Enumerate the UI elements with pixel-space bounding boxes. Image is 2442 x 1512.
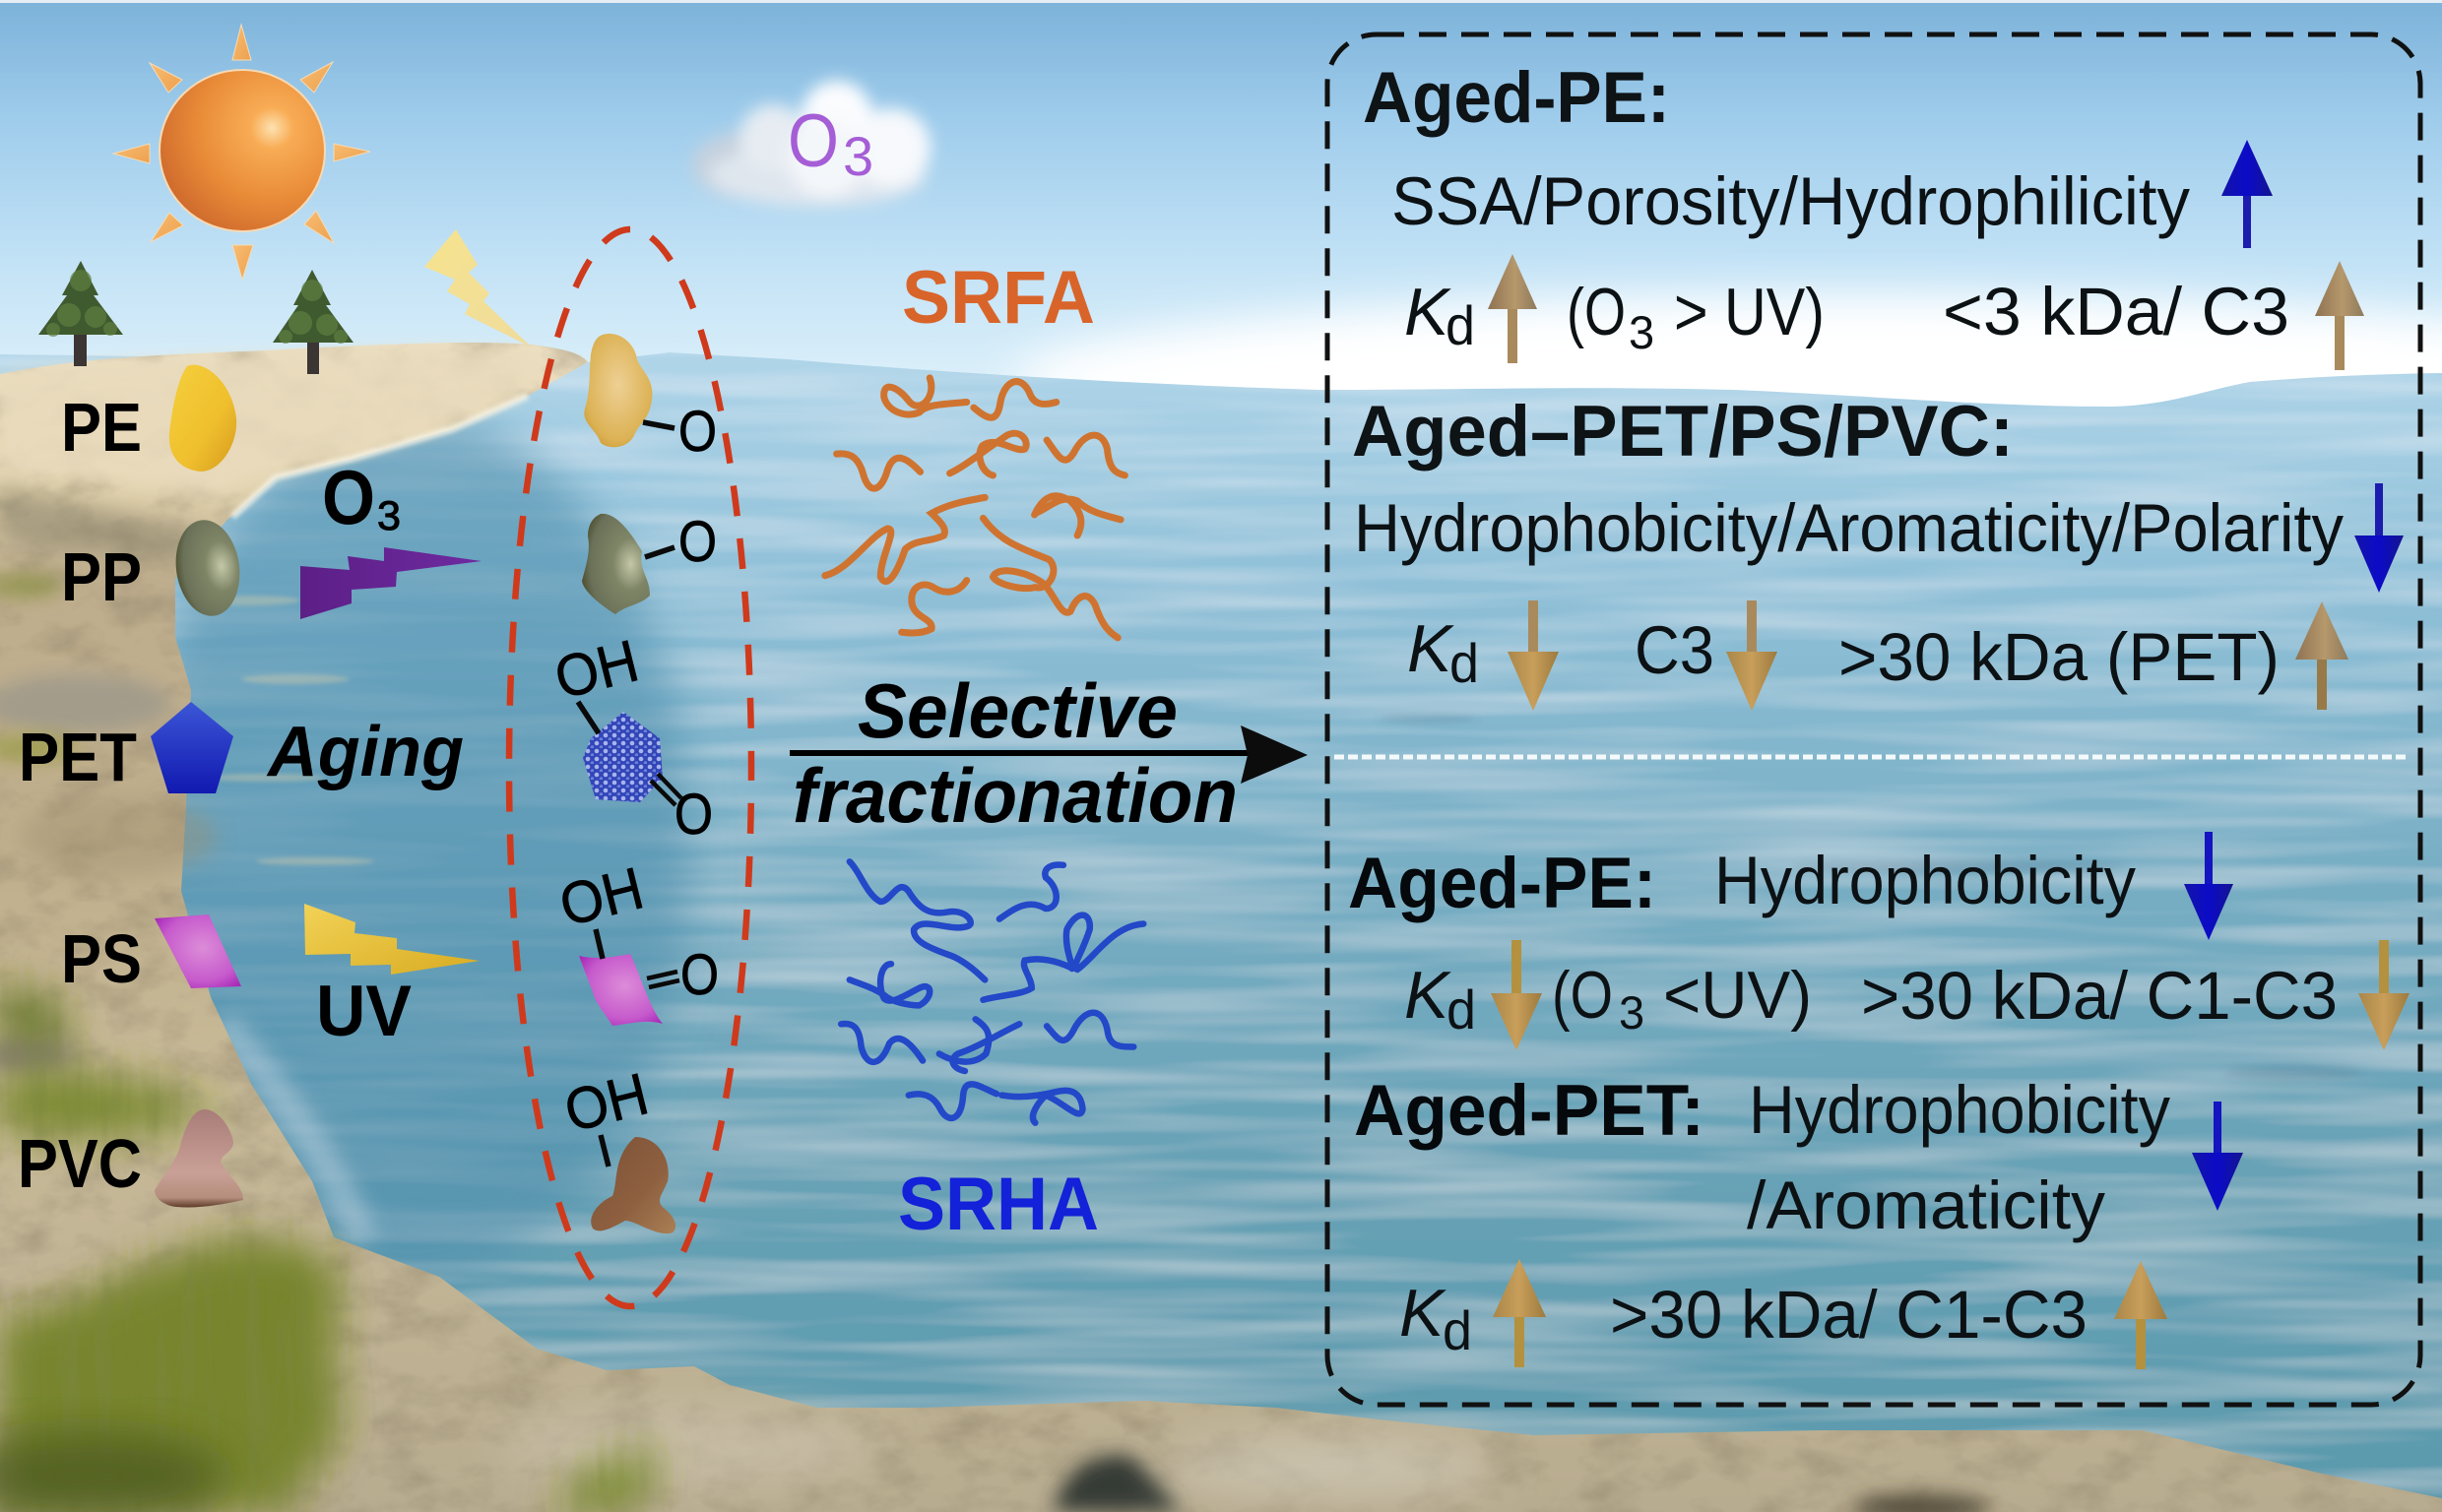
icon: pine tree right [273, 270, 353, 374]
icon: PET particle [151, 702, 233, 793]
aged PS with hydroxyl and carbonyl: OH [553, 854, 650, 939]
aged PET with hydroxyl and carbonyl: O [675, 783, 713, 847]
arrow: gold down [1508, 600, 1559, 711]
text: 30 kDa C1-C3: >30 kDa/ C1-C3 [1610, 1277, 2088, 1353]
polymer labels and particles [18, 365, 246, 1208]
sun disc [160, 70, 325, 231]
arrow: gold down [2358, 940, 2410, 1050]
text: 30 kDa PET: >30 kDa (PET) [1838, 619, 2280, 695]
arrow: UV yellow bolt [304, 904, 480, 975]
text: O3 greater than UV [1567, 275, 1825, 358]
sun rays [113, 25, 370, 280]
SRHA section [1348, 832, 2410, 1369]
heading: Aged-PE: Aged-PE: [1363, 58, 1670, 138]
arrow: blue down [2192, 1102, 2243, 1211]
text: Kd: K [1399, 1276, 1446, 1351]
arrow: gold up [2114, 1261, 2167, 1369]
UV label: UV [316, 972, 412, 1051]
icon: cloud with O3: 3 [843, 125, 873, 187]
sky [0, 0, 2442, 413]
PS label: PS [61, 920, 142, 997]
text: Kd: K [1404, 275, 1451, 349]
icon: PP particle [169, 516, 246, 620]
PP label: PP [61, 538, 142, 615]
sea [0, 352, 2442, 1512]
O3 aging label: 3 [377, 492, 401, 538]
text: O3 greater than UV: 3 [1629, 306, 1654, 358]
foam [232, 396, 528, 517]
grass [0, 984, 660, 1512]
arrow: blue down [2184, 832, 2233, 940]
text: Kd: d [1449, 632, 1479, 694]
darker shallow water at left [138, 413, 689, 1280]
arrow: O3 purple bolt [300, 547, 482, 619]
PET label: PET [19, 719, 137, 795]
text: O3 greater than UV: > UV) [1674, 275, 1825, 349]
text: 30 kDa C1-C3: >30 kDa/ C1-C3 [1861, 958, 2338, 1034]
text: O3 greater than UV: (O [1567, 275, 1626, 349]
aged PVC with hydroxyl [558, 1060, 675, 1233]
label: O3: O [788, 99, 839, 183]
text: C3: C3 [1635, 612, 1714, 688]
heading: Aged PET PS PVC: Aged–PET/PS/PVC: [1352, 392, 2014, 472]
Selective fractionation arrow and label [790, 667, 1308, 839]
aged PET with hydroxyl and carbonyl: OH [548, 627, 645, 712]
Selective text: Selective [858, 667, 1178, 754]
fractionation text: fractionation [793, 752, 1238, 839]
PE label: PE [61, 389, 142, 466]
aged PE with ketone: O [678, 400, 717, 464]
arrow: tan up [2315, 261, 2364, 370]
arrow: gold down [1491, 940, 1542, 1050]
arrow: gold up [2295, 601, 2348, 710]
aged PVC with hydroxyl: OH [558, 1060, 655, 1145]
aged PET with hydroxyl and carbonyl [548, 627, 713, 847]
arrow: gold up [1493, 1259, 1546, 1367]
heading: Aged-PE: Aged-PE: [1348, 844, 1656, 923]
arrow: blue up [2221, 140, 2273, 248]
icon: PVC particle [155, 1109, 243, 1208]
aged PP with ketone [582, 510, 717, 614]
panel: results dashed box [1327, 34, 2420, 1405]
O3 aging label: O [322, 454, 375, 540]
text: Kd [1399, 1276, 1472, 1361]
text: Kd: K [1404, 958, 1451, 1033]
arrow head [1241, 725, 1308, 784]
rocks and shadows [0, 482, 1989, 1512]
text: Kd [1404, 275, 1475, 356]
text: hydrophobicity: Hydrophobicity [1749, 1072, 2170, 1148]
text: O3 less than UV [1552, 958, 1812, 1039]
SRFA molecules [825, 378, 1125, 638]
arrow: gold down [1726, 600, 1777, 711]
smooth upper beach [0, 349, 527, 497]
aged PS with hydroxyl and carbonyl: O [680, 943, 719, 1007]
PVC label: PVC [18, 1125, 142, 1202]
SRFA label: SRFA [902, 256, 1095, 340]
text: Kd: d [1446, 294, 1475, 356]
red dashed ellipse around aged particles [509, 229, 751, 1306]
icon: sun [113, 25, 370, 280]
text: O3 less than UV: <UV) [1663, 958, 1812, 1033]
text: hydrophobicity: Hydrophobicity [1714, 843, 2136, 918]
text: SSA line: SSA/Porosity/Hydrophilicity [1391, 163, 2190, 239]
text: O3 less than UV: 3 [1619, 986, 1644, 1039]
text: Kd: K [1407, 611, 1454, 686]
arrow: tan up [1488, 254, 1537, 363]
icon: PE particle [169, 365, 236, 472]
SRFA section [1352, 58, 2404, 711]
text: hydrophobicity line: Hydrophobicity/Aromaticity/Polarity [1354, 490, 2344, 566]
icon: pale lightning bolt [424, 229, 532, 347]
aged PS with hydroxyl and carbonyl [553, 854, 719, 1026]
text: Kd [1404, 958, 1476, 1040]
text: aromaticity: /Aromaticity [1747, 1167, 2105, 1243]
text: Kd: d [1443, 1299, 1472, 1361]
icon: cloud with O3 [692, 81, 931, 207]
text: O3 less than UV: (O [1552, 958, 1613, 1033]
aged PE with ketone [584, 334, 717, 464]
text: Kd: d [1446, 978, 1476, 1040]
text: 3 kDa C3: <3 kDa/ C3 [1943, 274, 2289, 349]
heading: Aged-PET: Aged-PET: [1354, 1071, 1704, 1151]
icon: PS particle [155, 914, 241, 988]
Aging label: Aging [266, 713, 464, 791]
SRHA label: SRHA [898, 1163, 1099, 1246]
water reflections [202, 596, 374, 865]
aged PP with ketone: O [678, 510, 717, 574]
arrow: blue down [2354, 483, 2404, 593]
text: Kd [1407, 611, 1479, 694]
icon: pine tree left [38, 261, 123, 366]
arrow shaft [790, 750, 1248, 756]
shoreline land [0, 343, 2442, 1512]
SRHA molecules [841, 861, 1143, 1123]
aged particles [548, 334, 719, 1233]
white dashed divider [1334, 754, 2408, 760]
